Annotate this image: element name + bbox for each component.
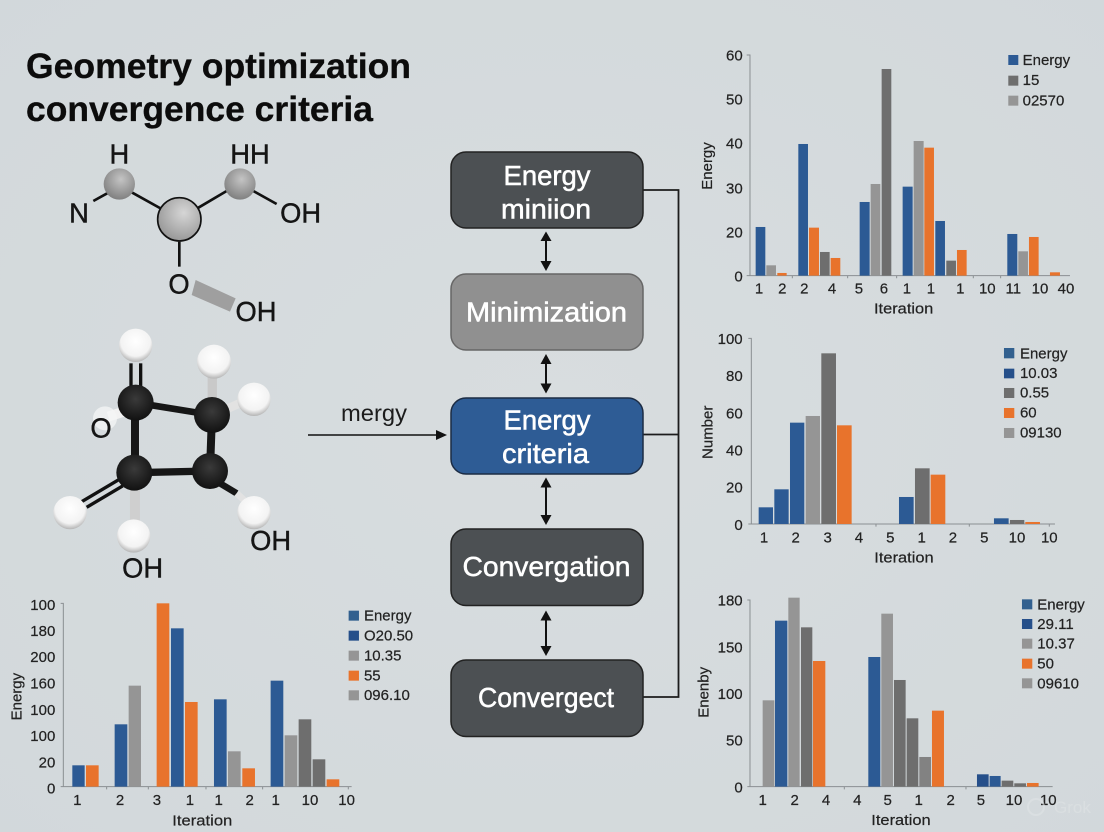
bar chart: middle right, Number vs Iteration (699, 331, 1068, 566)
bar chart: bottom right, Enenby vs Iteration: 09610 (1037, 675, 1079, 692)
molecule diagram: ball and stick, grey atoms: HH (230, 138, 270, 169)
bar chart: bottom right, Enenby vs Iteration: 150 (718, 639, 743, 656)
bar chart: middle right, Number vs Iteration: 2 (949, 529, 957, 546)
bar chart: bottom right, Enenby vs Iteration: 29.11 (1037, 616, 1074, 633)
bar chart: bottom left, Energy vs Iteration: 160 (30, 676, 55, 693)
title (26, 47, 411, 129)
bar chart: top right, Energy vs Iteration: 1 (755, 280, 763, 297)
bar chart: top right, Energy vs Iteration: 20 (726, 224, 743, 241)
bar chart: top right, Energy vs Iteration: 6 (880, 280, 888, 297)
bar chart: bottom left, Energy vs Iteration: 1 (271, 792, 280, 809)
bar chart: top right, Energy vs Iteration: 50 (726, 92, 743, 109)
double arrow (540, 354, 552, 394)
bar chart: top right, Energy vs Iteration: Energy (1023, 52, 1071, 69)
input arrow labelled mergy (308, 400, 447, 440)
bar chart: middle right, Number vs Iteration: 0.55 (1020, 385, 1049, 402)
bar chart: bottom right, Enenby vs Iteration: 180 (718, 593, 743, 610)
bar chart: middle right, Number vs Iteration: 4 (855, 529, 863, 546)
bar chart: top right, Energy vs Iteration: 60 (726, 48, 743, 65)
bar chart: bottom right, Enenby vs Iteration: 0 (734, 779, 743, 796)
bar chart: middle right, Number vs Iteration: 3 (823, 529, 832, 546)
bar chart: bottom right, Enenby vs Iteration: 2 (790, 792, 799, 809)
double arrow (540, 232, 552, 271)
bar chart: bottom left, Energy vs Iteration: 1 (214, 792, 223, 809)
bar chart: bottom left, Energy vs Iteration: 100 (30, 728, 55, 745)
bar chart: middle right, Number vs Iteration: Number (699, 406, 716, 459)
bar chart: middle right, Number vs Iteration: 0 (734, 517, 743, 534)
bar chart: bottom right, Enenby vs Iteration: 50 (1037, 655, 1054, 672)
bar chart: bottom right, Enenby vs Iteration: 5 (883, 792, 892, 809)
bar chart: bottom left, Energy vs Iteration: Energy (364, 608, 412, 625)
watermark: Grok (1028, 798, 1091, 817)
molecule diagram: ring with black carbon atoms and white hydrogens (53, 329, 291, 583)
bar chart: middle right, Number vs Iteration: Iteration (874, 549, 934, 566)
bar chart: middle right, Number vs Iteration: 10.03 (1020, 365, 1057, 382)
bar chart: middle right, Number vs Iteration: 2 (791, 529, 800, 546)
bar chart: top right, Energy vs Iteration: 15 (1023, 72, 1039, 89)
bar chart: middle right, Number vs Iteration: 1 (917, 529, 926, 546)
bar chart: bottom right, Enenby vs Iteration: 50 (726, 733, 743, 750)
molecule diagram: ball and stick, grey atoms: N (69, 198, 89, 229)
bar chart: top right, Energy vs Iteration: 40 (726, 136, 743, 153)
watermark: Grok: Grok (1054, 798, 1091, 817)
bar chart: middle right, Number vs Iteration: 1 (760, 529, 768, 546)
bar chart: bottom right, Enenby vs Iteration: 4 (853, 792, 861, 809)
molecule diagram: ring with black carbon atoms and white hydrogens: OH (122, 552, 163, 583)
bar chart: top right, Energy vs Iteration: 2 (778, 280, 786, 297)
molecule diagram: ball and stick, grey atoms: OH (280, 198, 321, 229)
bar chart: middle right, Number vs Iteration: 5 (886, 529, 894, 546)
bar chart: top right, Energy vs Iteration: 02570 (1023, 92, 1064, 109)
title: Geometry optimization (26, 47, 411, 86)
bar chart: bottom left, Energy vs Iteration: O20.50 (364, 628, 413, 645)
bar chart: bottom right, Enenby vs Iteration: 10 (1006, 792, 1022, 809)
double arrow (540, 610, 552, 656)
bar chart: top right, Energy vs Iteration: 10 (1032, 280, 1048, 297)
bar chart: top right, Energy vs Iteration (699, 48, 1074, 318)
bar chart: bottom left, Energy vs Iteration (8, 597, 413, 829)
bar chart: bottom left, Energy vs Iteration: 55 (364, 667, 381, 684)
bar chart: middle right, Number vs Iteration: 60 (726, 405, 743, 422)
bar chart: top right, Energy vs Iteration: 10 (979, 280, 996, 297)
bar chart: bottom left, Energy vs Iteration: 2 (245, 792, 254, 809)
bar chart: top right, Energy vs Iteration: 1 (903, 280, 911, 297)
flow box: Convergect: Convergect (478, 682, 614, 713)
flow box: Energy miniion: miniion (501, 194, 591, 224)
bar chart: bottom left, Energy vs Iteration: 20 (39, 754, 55, 771)
flow box: Minimization: Minimization (466, 296, 627, 328)
molecule diagram: ball and stick, grey atoms (69, 138, 321, 327)
bar chart: bottom left, Energy vs Iteration: 096.10 (364, 687, 410, 704)
input arrow labelled mergy: mergy (341, 400, 407, 426)
bar chart: bottom left, Energy vs Iteration: Iteration (172, 812, 232, 829)
molecule diagram: ball and stick, grey atoms: OH (235, 296, 276, 327)
bar chart: top right, Energy vs Iteration: 30 (726, 180, 743, 197)
bar chart: middle right, Number vs Iteration: 80 (726, 368, 743, 385)
bar chart: middle right, Number vs Iteration: 10 (1041, 529, 1058, 546)
bar chart: top right, Energy vs Iteration: 2 (800, 280, 808, 297)
bar chart: bottom right, Enenby vs Iteration: 10.37 (1037, 636, 1075, 653)
bar chart: top right, Energy vs Iteration: Energy (699, 142, 716, 190)
bar chart: top right, Energy vs Iteration: 1 (927, 280, 935, 297)
flow box: Minimization (451, 274, 643, 350)
bar chart: middle right, Number vs Iteration: Energy (1020, 345, 1068, 362)
bar chart: middle right, Number vs Iteration: 100 (718, 331, 743, 348)
flow box: Energy miniion: Energy (504, 160, 591, 191)
bar chart: bottom right, Enenby vs Iteration: Iteration (871, 812, 931, 829)
bar chart: middle right, Number vs Iteration: 40 (726, 443, 743, 460)
bar chart: bottom left, Energy vs Iteration: 3 (153, 792, 161, 809)
bar chart: bottom left, Energy vs Iteration: 10 (338, 792, 355, 809)
molecule diagram: ball and stick, grey atoms: H (109, 138, 129, 169)
bar chart: bottom right, Enenby vs Iteration: 1 (914, 792, 923, 809)
flow box: Energy criteria (highlighted) (451, 398, 643, 474)
molecule diagram: ring with black carbon atoms and white hydrogens: OH (250, 525, 291, 556)
bar chart: bottom left, Energy vs Iteration: 10.35 (364, 647, 401, 664)
bar chart: middle right, Number vs Iteration: 09130 (1020, 425, 1062, 442)
bar chart: bottom left, Energy vs Iteration: 2 (116, 792, 124, 809)
bar chart: middle right, Number vs Iteration: 5 (980, 529, 988, 546)
bar chart: bottom right, Enenby vs Iteration: 2 (946, 792, 955, 809)
bar chart: middle right, Number vs Iteration: 10 (1009, 529, 1025, 546)
bar chart: bottom right, Enenby vs Iteration: Enenby (695, 666, 712, 718)
bar chart: top right, Energy vs Iteration: 0 (734, 269, 743, 286)
bar chart: top right, Energy vs Iteration: 5 (855, 280, 863, 297)
bar chart: top right, Energy vs Iteration: 11 (1006, 280, 1021, 297)
bar chart: top right, Energy vs Iteration: 4 (828, 280, 836, 297)
bar chart: bottom left, Energy vs Iteration: 200 (30, 649, 55, 666)
bar chart: bottom left, Energy vs Iteration: 1 (186, 792, 194, 809)
bar chart: middle right, Number vs Iteration: 60 (1020, 405, 1037, 422)
flow box: Energy criteria (highlighted): Energy (504, 404, 591, 436)
feedback connector line (642, 190, 678, 697)
bar chart: bottom left, Energy vs Iteration: 10 (302, 792, 318, 809)
bar chart: bottom right, Enenby vs Iteration: 1 (758, 792, 767, 809)
bar chart: middle right, Number vs Iteration: 20 (726, 480, 743, 497)
bar chart: bottom left, Energy vs Iteration: Energy (8, 672, 25, 720)
bar chart: top right, Energy vs Iteration: Iteration (874, 301, 933, 318)
bar chart: bottom right, Enenby vs Iteration: 100 (718, 686, 743, 703)
bar chart: bottom right, Enenby vs Iteration: 5 (977, 792, 985, 809)
bar chart: top right, Energy vs Iteration: 40 (1058, 280, 1074, 297)
molecule diagram: ring with black carbon atoms and white hydrogens: O (90, 412, 112, 443)
title: convergence criteria (26, 90, 374, 129)
flow box: Convergation (451, 529, 643, 606)
flow box: Convergation: Convergation (462, 551, 630, 582)
flow box: Convergect (451, 660, 643, 736)
double arrow (540, 478, 552, 525)
bar chart: bottom right, Enenby vs Iteration (695, 593, 1085, 829)
bar chart: bottom left, Energy vs Iteration: 100 (30, 597, 55, 614)
bar chart: bottom left, Energy vs Iteration: 0 (47, 781, 55, 798)
bar chart: bottom right, Enenby vs Iteration: Energy (1037, 596, 1085, 613)
bar chart: top right, Energy vs Iteration: 1 (956, 280, 964, 297)
bar chart: bottom left, Energy vs Iteration: 180 (30, 623, 55, 640)
bar chart: bottom left, Energy vs Iteration: 1 (73, 792, 81, 809)
bar chart: bottom right, Enenby vs Iteration: 10 (1040, 792, 1057, 809)
flow box: Energy miniion (451, 152, 643, 228)
bar chart: bottom left, Energy vs Iteration: 100 (30, 702, 55, 719)
bar chart: bottom right, Enenby vs Iteration: 4 (822, 792, 830, 809)
flow box: Energy criteria (highlighted): criteria (502, 438, 590, 469)
molecule diagram: ball and stick, grey atoms: O (168, 268, 190, 299)
